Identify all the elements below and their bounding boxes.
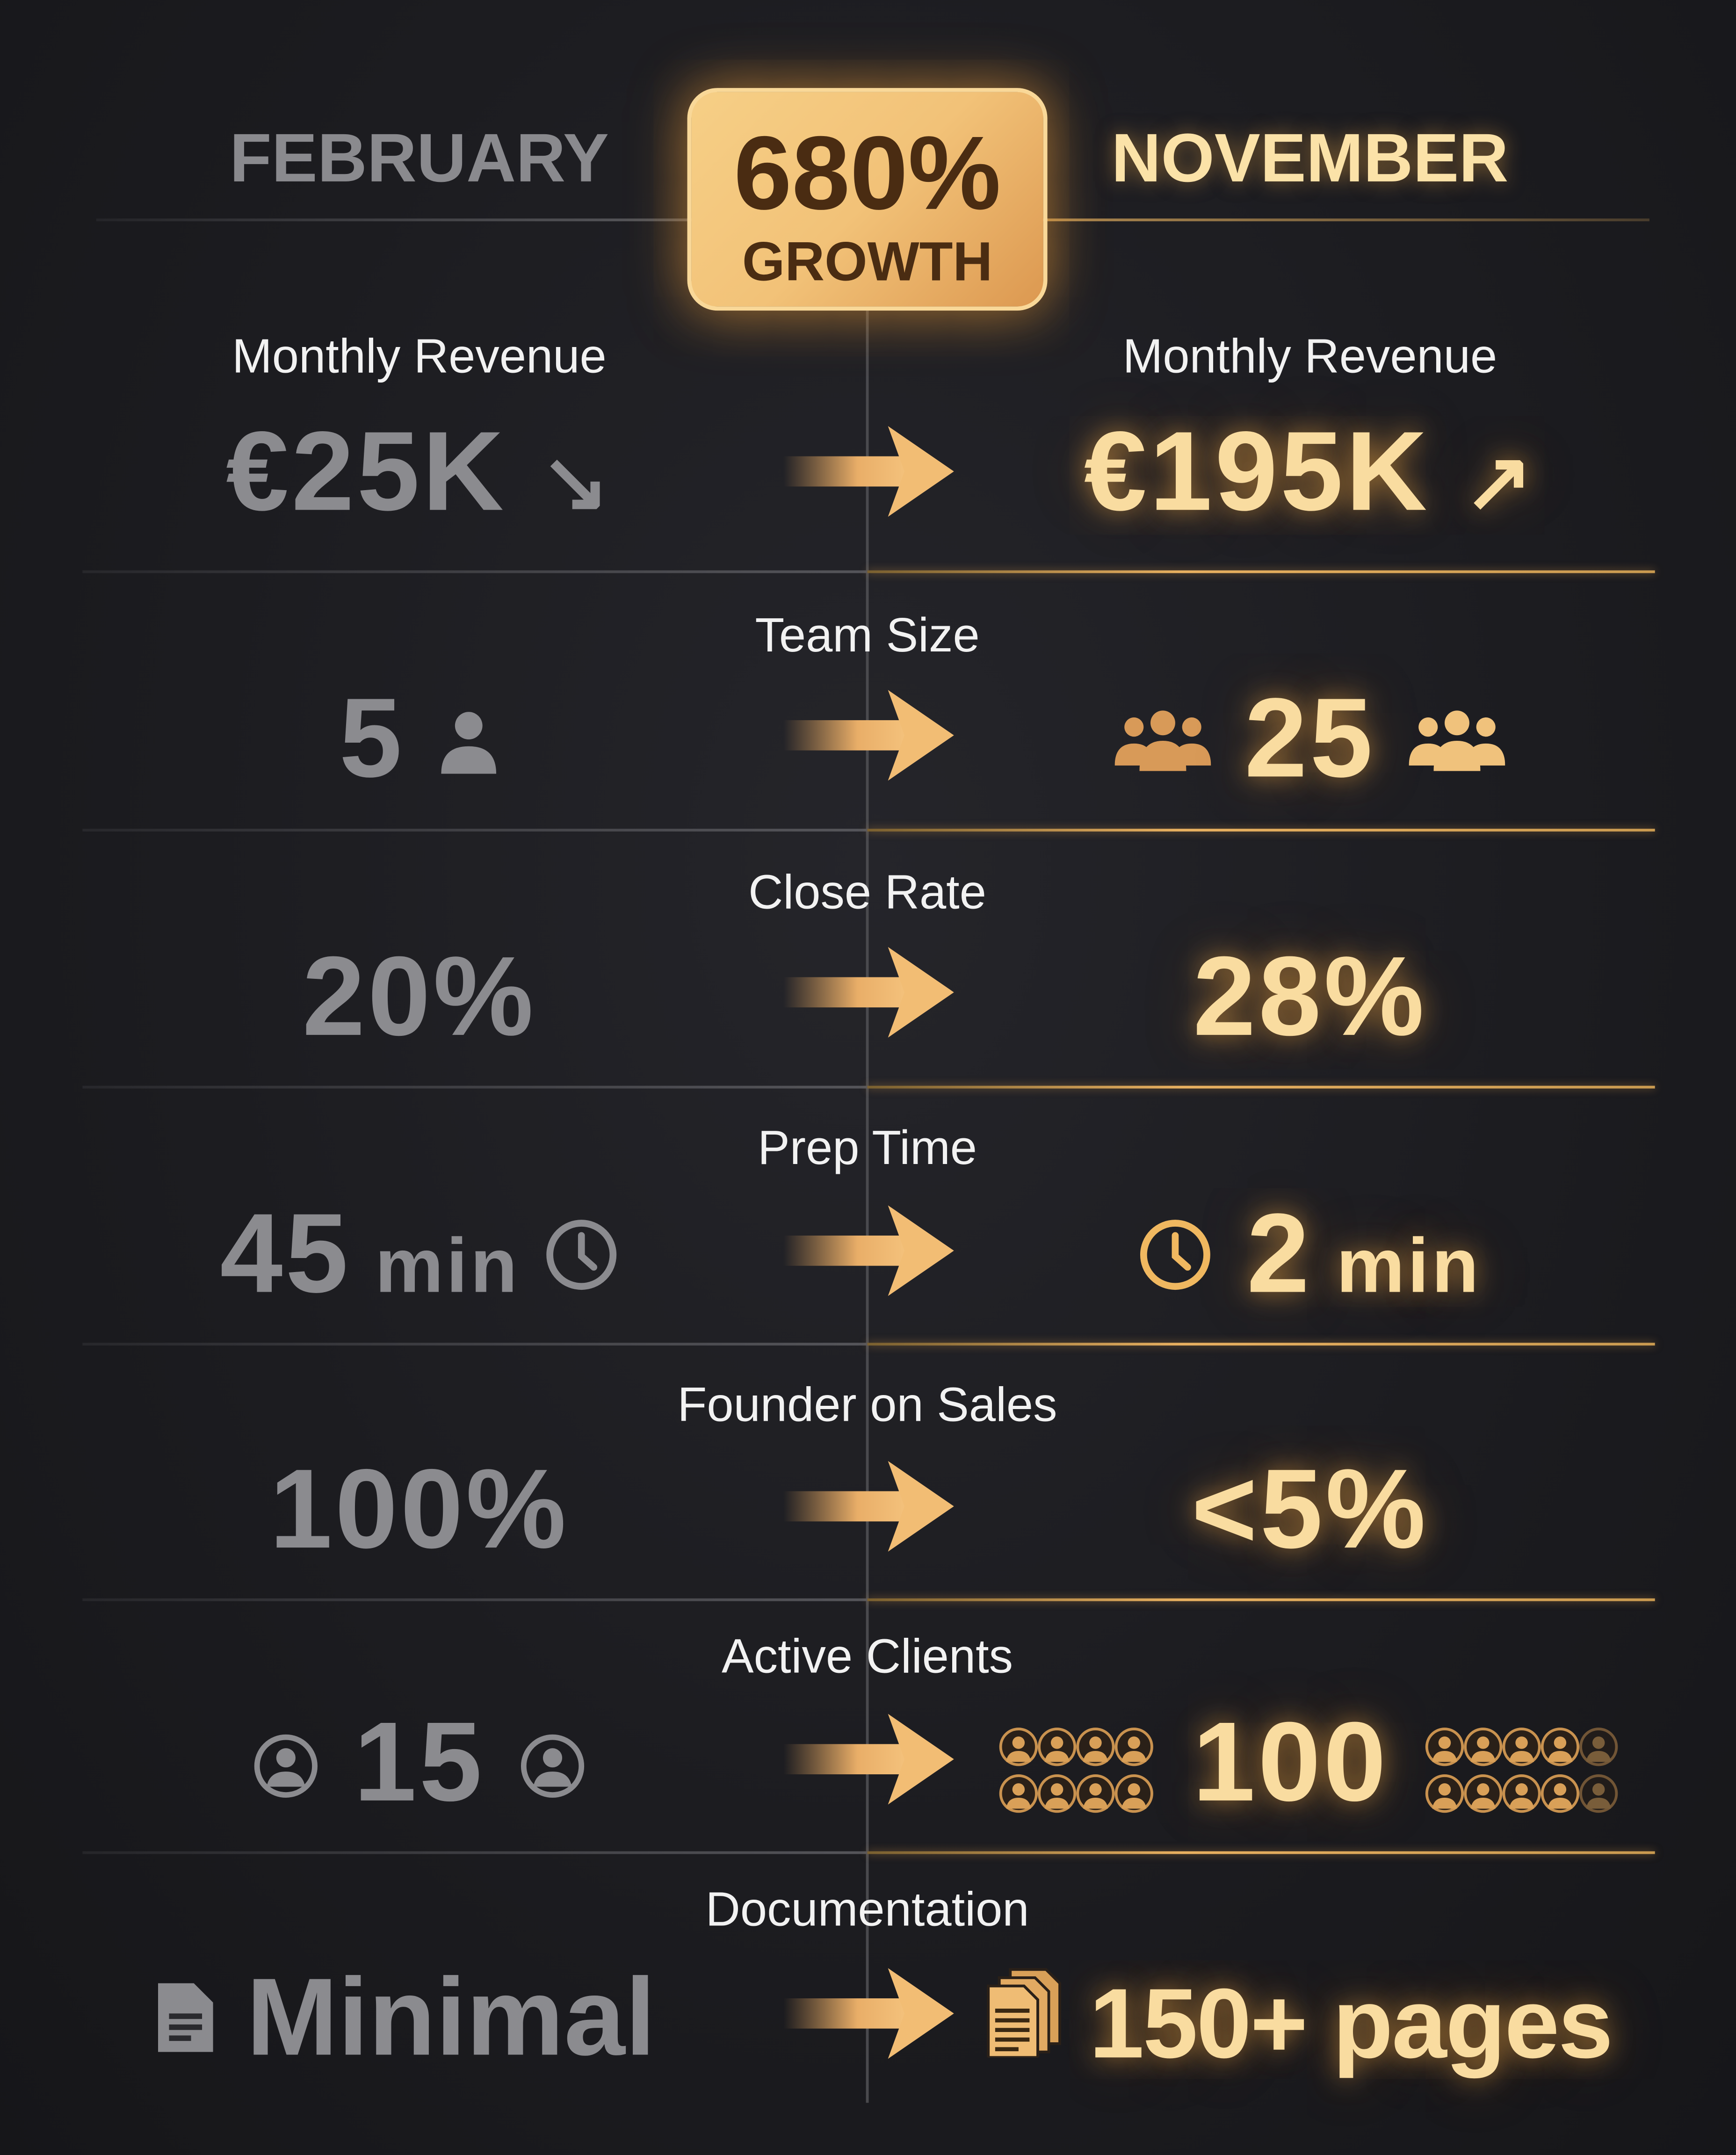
row 1 label right: Monthly Revenue: Monthly Revenue xyxy=(1123,330,1497,383)
row 2 label: Team Size: Team Size xyxy=(755,609,980,663)
row 7 left value xyxy=(14,1963,797,2073)
row 3 arrow xyxy=(783,944,957,1041)
row 7 label: Documentation: Documentation xyxy=(706,1883,1029,1937)
row 2 right value: 25 xyxy=(1244,676,1375,801)
badge: 680% growth xyxy=(687,88,1048,311)
row 5 right value: <5% xyxy=(1192,1447,1428,1572)
row 4 left value: 45 min xyxy=(220,1192,520,1316)
row 1 left value: €25K ↘ xyxy=(226,410,613,535)
row 5 label: Founder on Sales: Founder on Sales xyxy=(678,1379,1057,1432)
row 2 right value xyxy=(897,683,1722,796)
row 6 left value xyxy=(7,1707,832,1820)
row 4 right value: 2 min xyxy=(1247,1192,1482,1316)
row 6 right value xyxy=(897,1707,1722,1820)
header line xyxy=(96,218,1649,221)
badge: 680% growth: GROWTH xyxy=(742,232,992,293)
row 3 right value: 28% xyxy=(1193,934,1427,1060)
row 7 arrow xyxy=(783,1965,957,2061)
row 4 label: Prep Time: Prep Time xyxy=(758,1121,977,1175)
row 6 arrow xyxy=(783,1711,957,1808)
row 6 label: Active Clients: Active Clients xyxy=(722,1630,1013,1684)
center vertical line xyxy=(866,311,868,2103)
row 2 arrow xyxy=(783,687,957,783)
row 3 left value: 20% xyxy=(302,934,536,1060)
row 1 arrow xyxy=(783,423,957,520)
row 6 left value: 15 xyxy=(354,1700,485,1825)
row 1 right value: €195K ↗ xyxy=(1084,410,1536,535)
row 7 left value: Minimal xyxy=(246,1956,656,2078)
row 4 left value xyxy=(7,1199,832,1311)
row 1 label left: Monthly Revenue: Monthly Revenue xyxy=(232,330,607,383)
row 3 label: Close Rate: Close Rate xyxy=(748,866,986,919)
row 4 right value xyxy=(897,1199,1722,1311)
row 5 arrow xyxy=(783,1458,957,1555)
row 6 right value: 100 xyxy=(1193,1700,1389,1825)
heading: November: NOVEMBER xyxy=(1111,120,1509,196)
row 4 arrow xyxy=(783,1202,957,1299)
row 7 right value: 150+ pages xyxy=(1089,1969,1612,2079)
row 5 left value: 100% xyxy=(269,1447,569,1572)
heading: February: FEBRUARY xyxy=(230,120,609,196)
row 2 left value: 5 xyxy=(339,676,405,801)
row 2 left value xyxy=(7,683,832,796)
badge: 680% growth: 680% xyxy=(734,116,1001,232)
